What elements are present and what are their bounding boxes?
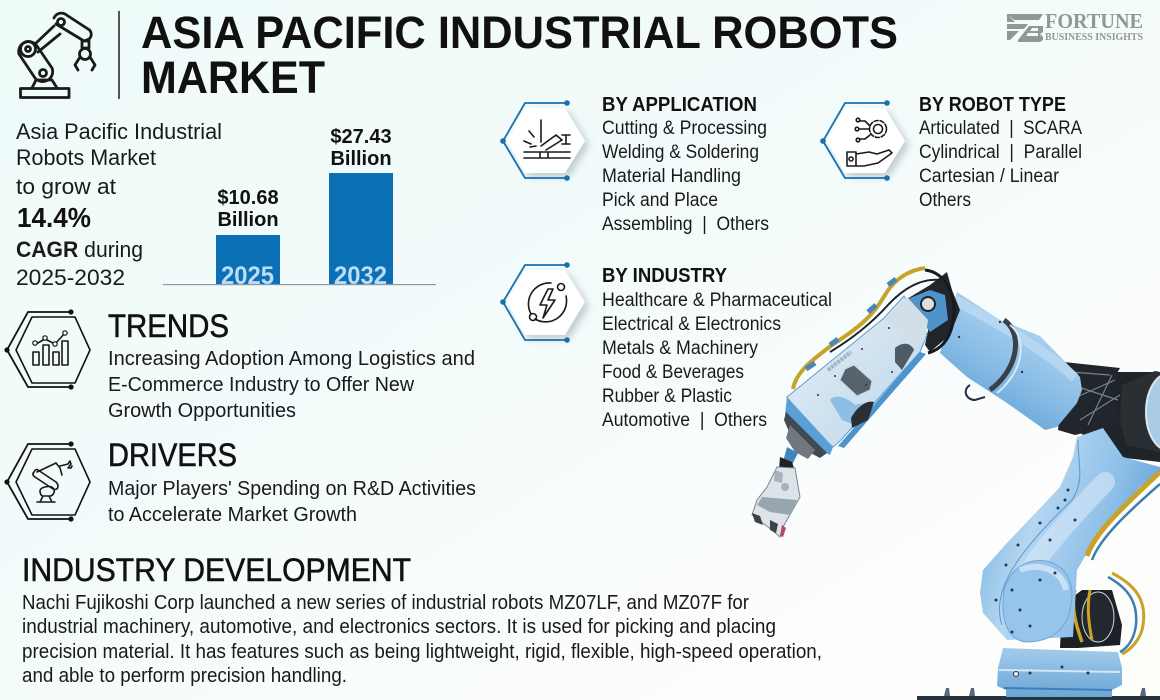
text: by robot type: BY ROBOT TYPE xyxy=(919,94,1066,116)
text: industry development: precision material. It has features such as being lightweight, rigid, flexible, high-speed operation, xyxy=(22,641,822,663)
text: CAGR summary xyxy=(16,119,222,290)
text: CAGR summary: 14.4% xyxy=(17,202,91,233)
text: by robot type: Cylindrical | Parallel xyxy=(919,142,1082,163)
text: by industry: Electrical & Electronics xyxy=(602,314,781,335)
text: CAGR summary: Robots Market xyxy=(16,145,156,170)
text: by application: Cutting & Processing xyxy=(602,118,767,139)
text: by application: Welding & Soldering xyxy=(602,142,759,163)
icon: robot arm logo xyxy=(19,13,95,97)
title xyxy=(141,7,898,103)
value: 2025: $10.68 xyxy=(217,187,279,209)
divider xyxy=(118,11,120,99)
title: MARKET xyxy=(141,52,325,103)
text: by robot type: Cartesian / Linear xyxy=(919,166,1060,187)
text: by robot type xyxy=(919,94,1082,211)
text: by application: Assembling | Others xyxy=(602,214,769,235)
icon: trends hexagon xyxy=(4,309,90,390)
text: by industry: Healthcare & Pharmaceutical xyxy=(602,290,832,311)
rear motor and cables xyxy=(1060,590,1122,648)
icon: by robot type hexagon xyxy=(820,100,905,181)
text: by industry: Automotive | Others xyxy=(602,410,767,431)
text: trends xyxy=(108,308,475,422)
value: 2032 xyxy=(330,126,392,170)
robot flange xyxy=(785,397,833,455)
text: by industry xyxy=(602,265,832,431)
icon: by application hexagon xyxy=(500,100,585,181)
text: industry development: INDUSTRY DEVELOPMENT xyxy=(22,552,411,588)
robot cables xyxy=(793,268,925,389)
logo: Fortune Business Insights: FORTUNE xyxy=(1045,9,1143,33)
text: CAGR summary: 2025-2032 xyxy=(16,265,125,290)
text: by application: Pick and Place xyxy=(602,190,718,211)
text: by industry: Food & Beverages xyxy=(602,362,744,383)
text: by robot type: Articulated | SCARA xyxy=(919,118,1082,139)
text: by application: Material Handling xyxy=(602,166,741,187)
value: 2025 xyxy=(217,187,279,231)
robot upper arm xyxy=(940,292,1082,430)
robot wrist joint xyxy=(902,272,960,352)
bar: 2032: 2032 xyxy=(334,262,387,290)
bar: 2025 xyxy=(216,235,280,284)
text: trends: Growth Opportunities xyxy=(108,400,296,422)
robot shoulder joint xyxy=(1070,370,1160,462)
text: trends: E-Commerce Industry to Offer New xyxy=(108,374,415,396)
text: drivers: Major Players' Spending on R&D Activities xyxy=(108,478,476,500)
text: by application xyxy=(602,94,769,235)
robot forearm xyxy=(787,296,927,447)
text: by industry: Metals & Machinery xyxy=(602,338,758,359)
value: 2025: Billion xyxy=(217,209,279,231)
logo: Fortune Business Insights xyxy=(1007,9,1143,43)
text: drivers xyxy=(108,437,476,526)
text: trends: Increasing Adoption Among Logistics and xyxy=(108,348,475,370)
text: by industry: BY INDUSTRY xyxy=(602,265,728,287)
text: drivers: DRIVERS xyxy=(108,437,237,473)
bar: 2025: 2025 xyxy=(221,262,274,290)
robot arm cable xyxy=(1087,472,1160,556)
robot base xyxy=(997,648,1122,697)
robot lower arm xyxy=(980,428,1160,640)
bar: 2032 xyxy=(329,173,393,290)
icon: drivers hexagon xyxy=(4,441,90,522)
title: ASIA PACIFIC INDUSTRIAL ROBOTS xyxy=(141,7,898,58)
text: CAGR summary: Asia Pacific Industrial xyxy=(16,119,222,144)
text: industry development: Nachi Fujikoshi Corp launched a new series of industrial robots MZ07LF, and MZ07F for xyxy=(22,592,749,614)
text: industry development xyxy=(22,552,822,687)
text: by industry: Rubber & Plastic xyxy=(602,386,732,407)
text: CAGR summary: CAGR during xyxy=(16,237,143,262)
icon: by industry hexagon xyxy=(500,262,585,343)
value: 2032: Billion xyxy=(330,148,392,170)
text: drivers: to Accelerate Market Growth xyxy=(108,504,357,526)
text: by application: BY APPLICATION xyxy=(602,94,757,116)
logo: Fortune Business Insights: BUSINESS INSIGHTS xyxy=(1045,31,1143,43)
robot gripper xyxy=(783,447,798,467)
text: industry development: industrial machinery, automotive, and electronics sectors. It is used for picking and placing xyxy=(22,616,776,638)
text: CAGR summary: to grow at xyxy=(16,174,116,199)
bar chart xyxy=(163,126,436,290)
value: 2032: $27.43 xyxy=(330,126,392,148)
text: industry development: and able to perform precision handling. xyxy=(22,665,347,687)
photo: blue industrial robot arm xyxy=(752,268,1160,700)
text: by robot type: Others xyxy=(919,190,971,211)
robot platform xyxy=(917,696,1160,700)
text: trends: TRENDS xyxy=(108,308,229,344)
